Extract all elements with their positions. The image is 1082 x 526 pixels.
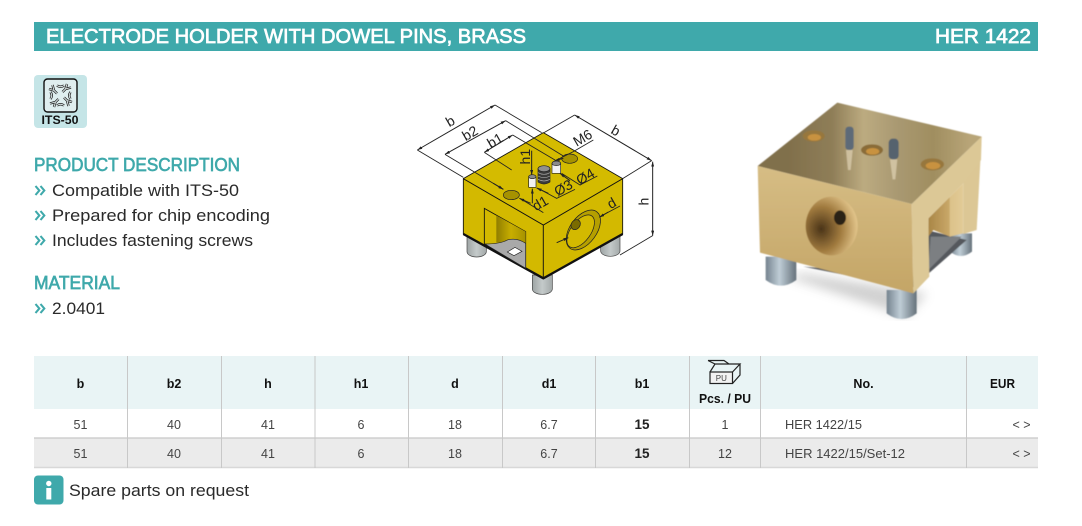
table row 2: < > <box>1012 447 1031 461</box>
dimension labels: Ø4 <box>573 165 597 188</box>
side bore <box>806 197 858 255</box>
table row 2: 6.7 <box>540 447 558 461</box>
table column headers: d1 <box>542 377 556 391</box>
block top <box>758 103 982 204</box>
table row 1: 6.7 <box>540 418 558 432</box>
shadow <box>787 273 927 317</box>
title: ELECTRODE HOLDER WITH DOWEL PINS, BRASS <box>46 26 526 48</box>
badge: ITS-50: ITS-50 <box>42 115 78 127</box>
table row 2: 51 <box>74 447 87 461</box>
table row 1: 41 <box>261 418 275 432</box>
block right side <box>912 137 982 293</box>
dimension labels: d <box>604 194 619 212</box>
specification table <box>34 356 1038 468</box>
table row 1: HER 1422/15 <box>785 418 862 432</box>
list: product description: Includes fastening screws <box>52 231 253 250</box>
table row 1 <box>74 417 1031 432</box>
table row 1: 40 <box>167 418 181 432</box>
table column headers <box>77 377 1015 406</box>
table column headers: b1 <box>635 377 649 391</box>
table column headers: b <box>77 377 85 391</box>
dimension labels: b <box>443 112 458 130</box>
top holes <box>503 154 578 200</box>
pins <box>467 236 620 294</box>
icon: packaging unit box: PU <box>716 374 727 383</box>
table column headers: No. <box>853 377 874 391</box>
front left pin <box>766 257 796 286</box>
dowel pins <box>845 127 899 179</box>
table row 2: 12 <box>718 447 732 461</box>
alternate row background <box>34 438 1038 468</box>
product photo <box>758 103 982 319</box>
table column headers: Pcs. / PU <box>699 392 751 406</box>
table row 2 <box>74 446 1031 461</box>
list: product description <box>36 181 270 250</box>
dimension drawing <box>417 105 653 294</box>
table row 1: 51 <box>74 418 87 432</box>
window cut-out <box>484 208 526 268</box>
table column headers: h <box>264 377 272 391</box>
table header background <box>34 356 1038 409</box>
table column headers: d <box>451 377 459 391</box>
table column headers: EUR <box>990 377 1015 391</box>
table row 2: 41 <box>261 447 275 461</box>
dowel pins and screw <box>529 161 561 187</box>
table row 1: 6 <box>358 418 365 432</box>
product code: HER 1422 <box>935 26 1031 48</box>
table row 1: 15 <box>634 417 650 432</box>
back pin <box>950 233 972 256</box>
dimension labels <box>443 112 652 214</box>
icon: info <box>34 476 64 504</box>
dimension labels: b <box>608 121 623 139</box>
dimension labels: d1 <box>529 192 551 214</box>
table column headers: h1 <box>354 377 368 391</box>
table row 2: 15 <box>634 446 650 461</box>
dimension labels: M6 <box>570 126 595 149</box>
icon: chuck symbol <box>44 79 77 112</box>
block front <box>758 166 913 293</box>
list: product description: Compatible with ITS-50 <box>52 181 239 200</box>
title bar <box>34 22 1038 51</box>
heading: product description: PRODUCT DESCRIPTION <box>34 155 240 175</box>
heading: material: MATERIAL <box>34 273 120 293</box>
front pin <box>887 290 917 319</box>
list: material: 2.0401 <box>52 299 105 318</box>
badge: ITS-50 <box>34 75 87 128</box>
icon: packaging unit box <box>708 360 740 384</box>
table row 1: < > <box>1012 418 1031 432</box>
table row 1: 1 <box>722 418 729 432</box>
base plate <box>803 230 967 288</box>
dimension lines <box>417 105 653 255</box>
table row 2: 6 <box>358 447 365 461</box>
dimension labels: b1 <box>484 129 506 151</box>
block body <box>463 133 623 278</box>
list: product description: Prepared for chip encoding <box>52 206 270 225</box>
dimension labels: b2 <box>459 122 481 144</box>
dimension labels: Ø3 <box>551 176 575 199</box>
side bore <box>559 204 607 256</box>
table column headers: b2 <box>167 377 181 391</box>
table row 2: HER 1422/15/Set-12 <box>785 447 905 461</box>
table row 2: 18 <box>448 447 462 461</box>
dimension labels: h1 <box>517 149 533 164</box>
dimension labels: h <box>636 198 652 206</box>
table row 2: 40 <box>167 447 181 461</box>
table row 1: 18 <box>448 418 462 432</box>
top holes <box>803 130 944 170</box>
note: spare parts: Spare parts on request <box>69 481 249 500</box>
